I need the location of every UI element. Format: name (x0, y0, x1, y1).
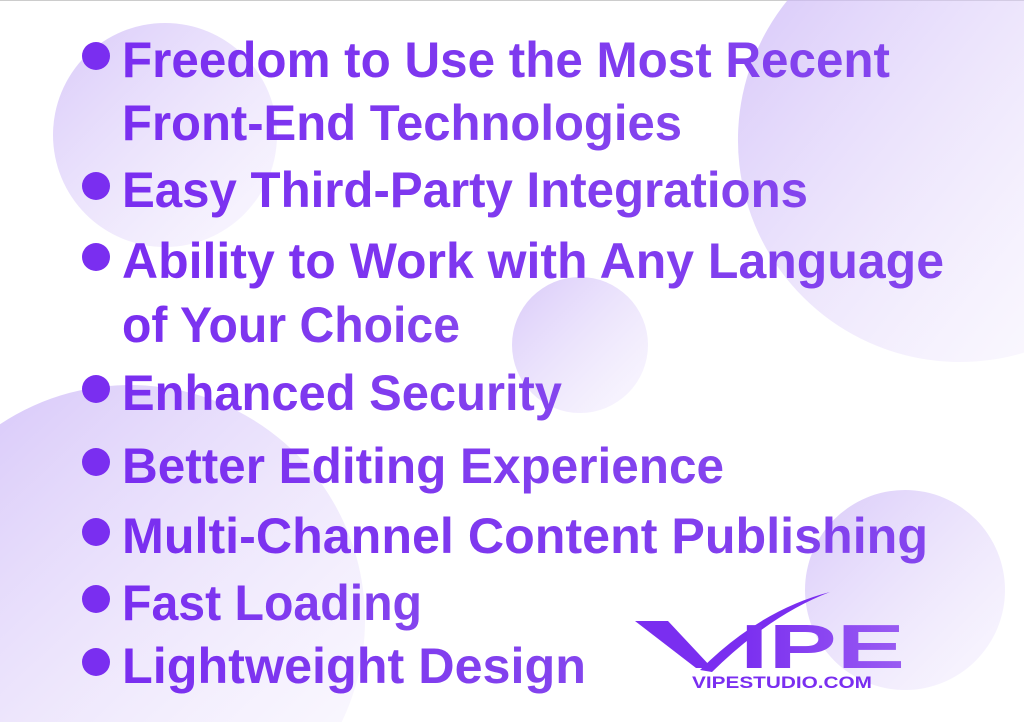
item 5: Better Editing Experience (122, 438, 724, 494)
item 8: Lightweight Design (122, 638, 586, 694)
item 6: Multi-Channel Content Publishing (122, 508, 928, 564)
item 2: Easy Third-Party Integrations (122, 162, 808, 218)
item 3 (82, 233, 944, 353)
item 1 (82, 32, 890, 151)
logo letters: IPE (740, 613, 905, 682)
logo url: VIPESTUDIO.COM (692, 673, 872, 692)
logo (635, 592, 905, 692)
item 3: of Your Choice (122, 297, 460, 353)
item 1: Freedom to Use the Most Recent (122, 32, 890, 88)
logo V left stroke (635, 621, 712, 668)
item 7: Fast Loading (122, 575, 422, 631)
item 3: Ability to Work with Any Language (122, 233, 944, 289)
logo swoosh (700, 592, 830, 672)
item 4: Enhanced Security (122, 365, 562, 421)
item 1: Front-End Technologies (122, 95, 682, 151)
bullet list (82, 32, 944, 694)
